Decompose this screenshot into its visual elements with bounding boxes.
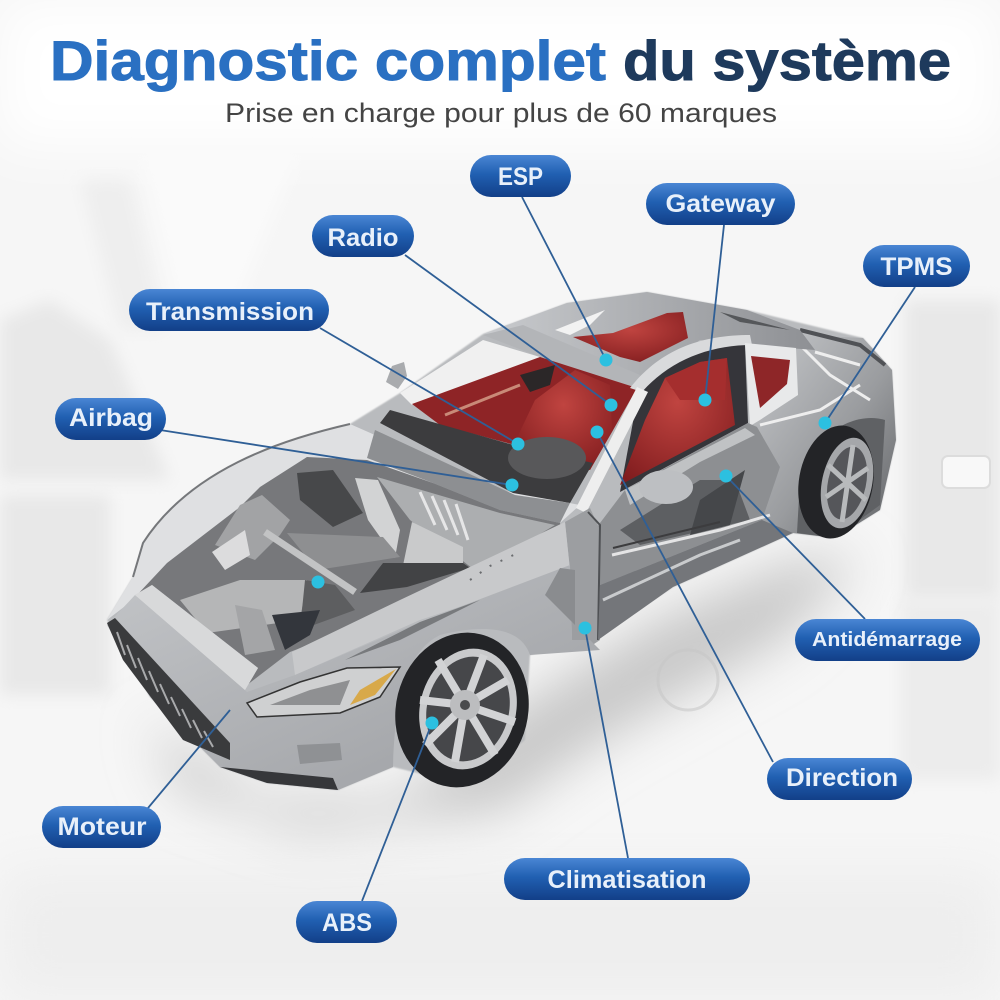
label: Gateway: [646, 183, 795, 225]
front grille: [107, 618, 230, 760]
sill: [598, 520, 793, 640]
roof arc pillar: [630, 335, 752, 392]
upper tray: [287, 533, 400, 570]
fender rail: [292, 522, 570, 675]
label: Radio: [312, 215, 414, 257]
strut brace: [265, 532, 355, 592]
fender inner shade: [345, 600, 480, 660]
engine bay: [137, 457, 565, 685]
label: Transmission: Transmission: [146, 298, 314, 326]
label: Moteur: Moteur: [58, 813, 147, 841]
roof glass: [555, 310, 605, 335]
rear quarter window: [751, 356, 790, 408]
label: Antidémarrage: Antidémarrage: [812, 629, 962, 651]
ground shadow: [150, 560, 860, 830]
rear seats seen through roof: [573, 312, 688, 362]
door: [597, 423, 780, 585]
floor: [180, 580, 307, 633]
label: ABS: ABS: [322, 909, 372, 937]
label: ABS: [296, 901, 397, 943]
subtitle: Prise en charge pour plus de 60 marques: [225, 98, 777, 128]
cowl: [367, 430, 570, 523]
dashboard: [380, 410, 593, 503]
label: ESP: [470, 155, 571, 197]
rear wheel: [790, 419, 882, 545]
front wheel: [379, 618, 545, 802]
engine detail: [235, 605, 275, 655]
label: Airbag: [55, 398, 166, 440]
label: Radio: Radio: [328, 224, 398, 252]
A pillar: [576, 387, 648, 513]
door opening: [620, 345, 748, 492]
connector dots: [312, 354, 832, 730]
right block: [400, 522, 463, 580]
title: [50, 29, 951, 92]
label: Antidémarrage: [795, 619, 980, 661]
cabin red interior: [412, 357, 637, 470]
label: TPMS: [863, 245, 970, 287]
label: Moteur: [42, 806, 161, 848]
windshield upper glass: [400, 340, 540, 405]
car body: [107, 292, 896, 790]
roof frame: [483, 292, 815, 384]
lower lip: [220, 767, 338, 790]
windshield header: [483, 325, 640, 388]
label: Direction: [767, 758, 912, 800]
wing mirror: [386, 362, 407, 389]
connector lines: [148, 197, 915, 901]
label: Airbag: Airbag: [69, 404, 153, 432]
brake booster area: [297, 470, 363, 527]
label: Direction: Direction: [786, 764, 898, 792]
door mirror: [639, 470, 693, 504]
car: [107, 292, 896, 830]
label: ESP: ESP: [498, 163, 543, 191]
firewall: [377, 477, 555, 572]
dark tray: [360, 563, 470, 593]
title: Diagnostic complet: [50, 29, 606, 92]
label: Gateway: Gateway: [666, 190, 776, 218]
radiator support: [135, 585, 258, 690]
hood glass: [107, 424, 580, 620]
title: du système: [623, 29, 951, 92]
label: TPMS: TPMS: [880, 253, 952, 281]
label: Climatisation: [504, 858, 750, 900]
rear quarter panel: [745, 335, 896, 545]
headlight: [247, 667, 400, 717]
label: Transmission: [129, 289, 329, 331]
front seat: [620, 358, 735, 485]
radiator support over fender: [135, 585, 258, 690]
lower air intake: [297, 743, 342, 764]
wheel tower: [215, 495, 290, 560]
label: Climatisation: Climatisation: [548, 866, 706, 894]
fender: [107, 565, 600, 790]
binnacle: [508, 437, 586, 479]
